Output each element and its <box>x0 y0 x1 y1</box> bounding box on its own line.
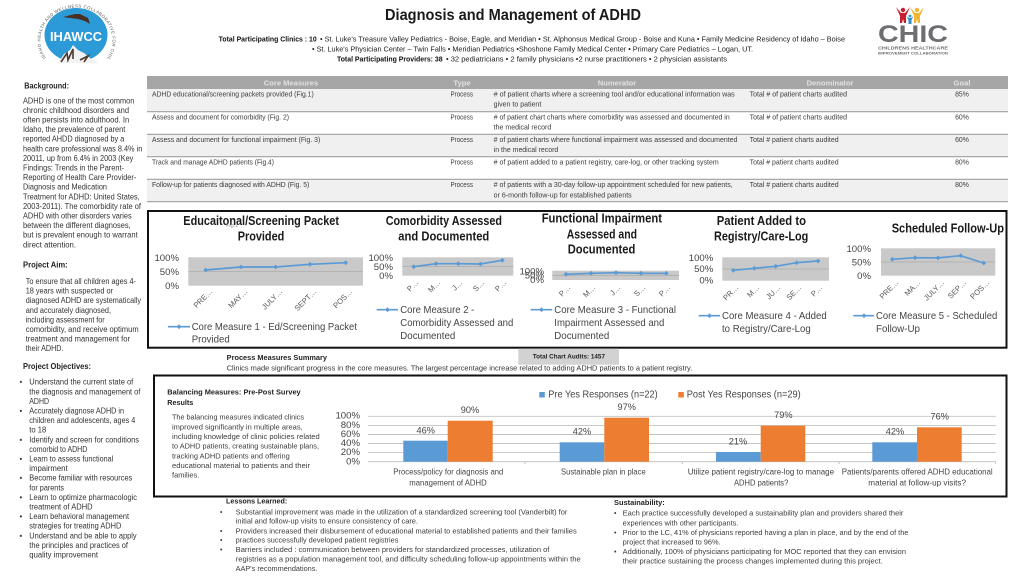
row 3 <box>152 137 969 154</box>
panel: project objectives: • <box>20 406 22 416</box>
panel: project objectives: Understand and be able to apply <box>29 531 137 540</box>
table header <box>264 78 970 88</box>
participating clinics and providers: • 32 pediatricians • 2 family physicians •2 nurse practitioners • 2 physician assistants <box>446 56 728 63</box>
row 3: Total # patient charts audited <box>750 137 839 144</box>
callout: total chart audits <box>518 349 619 365</box>
balancing measures text: families. <box>172 473 199 480</box>
panel: project objectives: Become familiar with resources <box>29 474 132 483</box>
panel: background: chronic childhood disorders and <box>23 106 129 115</box>
bar chart: pre/post survey: 0% <box>346 456 360 468</box>
participating clinics and providers <box>219 36 845 63</box>
chart 3: functional impairment: Core Measure 3 - Functional <box>554 305 676 316</box>
row 1: Process <box>450 92 473 98</box>
bar chart: pre/post survey: 60% <box>341 429 360 440</box>
panel: sustainability: Each practice successfully developed a sustainability plan and providers shared their <box>623 511 904 518</box>
panel: background: direct attention. <box>23 240 76 249</box>
balancing measures text: The balancing measures indicated clinics <box>172 415 305 422</box>
chart legend <box>539 390 801 401</box>
panel: sustainability: Additionally, 100% of physicians participating for MOC reported that they can envision <box>623 549 906 556</box>
row 4: Total # patient charts audited <box>750 160 839 166</box>
row 1: 85% <box>955 92 969 98</box>
panel: lessons learned: AAP's recommendations. <box>236 566 317 573</box>
panel: lessons learned: registries as a population management tool, and difficulty scheduling follow-up appointments within the <box>236 557 581 564</box>
panel: background: Treatment for ADHD: United States, <box>23 192 140 201</box>
row 3: # of patient charts where functional impairment was assessed and documented <box>494 137 738 144</box>
bar chart: pre/post survey: 79% <box>774 410 792 420</box>
panel: project objectives: • <box>20 435 22 444</box>
panel: project objectives: ADHD <box>29 397 49 406</box>
panel: background: Diagnosis and Medication <box>23 183 107 192</box>
panel: project aim: 18 years with suspected or <box>26 287 113 296</box>
chart 5: scheduled follow-up: JULY… <box>922 278 946 303</box>
process measures summary: Clinics made significant progress in the core measures. The largest percentage increase related to adding ADHD patients to a patient registry. <box>227 365 692 372</box>
panel: project objectives: Learn to assess functional <box>29 454 114 464</box>
row 3: in the medical record <box>494 147 558 154</box>
chart 1: educational/screening packet: 0% <box>165 281 179 292</box>
panel: project objectives: for parents <box>29 483 64 492</box>
row 5: Follow-up for patients diagnosed with ADHD (Fig. 5) <box>152 182 309 189</box>
chart legend: Post Yes Responses (n=29) <box>687 390 801 401</box>
row 4: Track and manage ADHD patients (Fig.4) <box>152 160 274 166</box>
participating clinics and providers: Total Participating Providers: 38 <box>337 56 443 63</box>
chart 2: comorbidity: M… <box>426 278 442 294</box>
panel: sustainability: • <box>614 530 617 537</box>
panel: project objectives: comorbid to ADHD <box>29 445 88 454</box>
bar chart: pre/post survey: ADHD patients? <box>734 478 789 487</box>
chart 1: educational/screening packet <box>154 214 363 346</box>
chart 5: scheduled follow-up: MA… <box>903 278 922 298</box>
panel: project objectives: • <box>20 474 22 483</box>
chart 2: comorbidity: Comorbidity Assessed and <box>400 318 513 329</box>
panel: project aim: their ADHD. <box>26 344 63 353</box>
row 3: Assess and document for functional impairment (Fig. 3) <box>152 137 320 144</box>
balancing measures text <box>167 389 320 480</box>
table header: Type <box>453 78 471 88</box>
balancing measures text: to ADHD patients, creating sustainable plans, <box>172 444 319 451</box>
balancing measures text: educational material to patients and their <box>172 463 311 470</box>
chart 4: patient added to registry: 50% <box>694 264 714 275</box>
chart 5: scheduled follow-up: SEP… <box>946 278 968 301</box>
row 2: Total # of patient charts audited <box>750 114 847 122</box>
chart 4: patient added to registry: 100% <box>689 253 714 264</box>
bar chart: pre/post survey <box>335 390 996 487</box>
chart 5: scheduled follow-up: 50% <box>852 258 871 268</box>
panel: project objectives: • <box>20 493 22 502</box>
panel: project objectives: Learn behavioral management <box>29 512 130 521</box>
chart 3: functional impairment <box>519 211 679 342</box>
panel: project objectives: quality improvement <box>29 550 99 560</box>
chart 1: educational/screening packet: 50% <box>160 267 179 278</box>
chart legend: Pre Yes Responses (n=22) <box>548 390 658 401</box>
panel: sustainability: project that increased to 96%. <box>623 540 721 546</box>
chart 5: scheduled follow-up <box>846 221 1004 335</box>
panel: project objectives: strategies for treating ADHD <box>29 522 122 531</box>
chart 3: functional impairment: Impairment Assessed and <box>554 318 664 329</box>
participating clinics and providers: • St. Luke's Treasure Valley Pediatrics - Boise, Eagle, and Meridian • St. Alphonsus Medical Group - Boise and Kuna • Family Medicine Residency of Idaho – Boise <box>320 36 845 44</box>
panel: sustainability: Prior to the LC, 41% of physicians reported having a plan in place, and by the end of the <box>623 530 909 537</box>
chart 2: comorbidity: S… <box>471 278 486 293</box>
chart 3: functional impairment: Functional Impairment <box>542 211 663 225</box>
chart 4: patient added to registry: M… <box>745 283 761 299</box>
table header: Numerator <box>598 78 636 88</box>
bar chart: pre/post survey: 42% <box>886 426 904 436</box>
panel: project aim: treatment and management for <box>26 335 130 344</box>
row 4: 80% <box>955 160 969 166</box>
chart 5: scheduled follow-up: POS… <box>968 278 991 301</box>
participating clinics and providers: Total Participating Clinics : 10 <box>219 36 317 44</box>
panel: lessons learned: • <box>220 509 223 516</box>
panel: lessons learned: • <box>220 547 223 554</box>
panel: lessons learned: practices successfully developed patient registries <box>236 538 399 545</box>
panel: background: ADHD with other disorders varies <box>23 212 132 220</box>
panel: project objectives: • <box>20 512 22 521</box>
panel: sustainability <box>614 500 909 566</box>
row 5: # of patients with a 30-day follow-up appointment scheduled for new patients, <box>494 182 733 189</box>
row 1: Total # of patient charts audited <box>750 92 847 98</box>
chart 1: educational/screening packet: PRE… <box>192 287 214 310</box>
row 1: # of patient charts where a screening tool and/or educational information was <box>494 92 735 98</box>
process measures summary: Process Measures Summary <box>227 355 327 362</box>
bar chart: pre/post survey: management of ADHD <box>409 478 487 487</box>
bar chart: pre/post survey: 42% <box>573 426 591 436</box>
row 2: 60% <box>955 114 969 122</box>
chart 3: functional impairment: J… <box>608 283 622 297</box>
chart 4: patient added to registry: P… <box>809 283 824 298</box>
chart 2: comorbidity: and Documented <box>398 230 489 244</box>
bar chart: pre/post survey: 97% <box>618 402 636 412</box>
bar chart: pre/post survey: 90% <box>461 405 479 415</box>
logo: IHAWCC: IHAWCC <box>50 30 102 44</box>
bar chart: pre/post survey: Sustainable plan in place <box>561 467 646 476</box>
panel: project aim: including assessment for <box>26 315 105 324</box>
panel: project aim <box>23 261 141 353</box>
row 3: 60% <box>955 137 969 144</box>
chart 3: functional impairment: P… <box>557 283 572 298</box>
row 1: ADHD educational/screening packets provided (Fig.1) <box>152 92 314 98</box>
participating clinics and providers: • St. Luke's Physician Center – Twin Falls • Meridian Pediatrics •Shoshone Family Medical Center • Primary Care Pediatrics – Logan, UT. <box>312 47 753 54</box>
chart 4: patient added to registry: to Registry/Care-Log <box>722 324 811 335</box>
chart 1: educational/screening packet: Provided <box>192 335 230 346</box>
panel: background: often persists into adulthood. In <box>23 116 129 124</box>
chart 5: scheduled follow-up: PRE… <box>878 278 900 301</box>
chart 4: patient added to registry: PR… <box>721 283 740 302</box>
chart 3: functional impairment: 50% <box>525 270 544 282</box>
chart 2: comorbidity: Core Measure 2 - <box>400 305 474 316</box>
panel: project aim: To ensure that all children ages 4- <box>26 277 136 286</box>
bar chart: pre/post survey: material at follow-up visits? <box>868 478 967 487</box>
row 5: or 6-month follow-up for established patients <box>494 192 632 200</box>
row 1: given to patient <box>494 102 541 108</box>
panel: lessons learned: • <box>220 538 223 545</box>
panel: sustainability: Sustainability: <box>614 500 665 507</box>
logo: IHAWCC <box>38 4 116 63</box>
chart 4: patient added to registry <box>689 214 829 335</box>
chart 3: functional impairment: P… <box>657 283 672 298</box>
chart 5: scheduled follow-up: Follow-Up <box>876 324 920 335</box>
logo: CHIC: IMPROVEMENT COLLABORATION <box>878 52 948 56</box>
panel: background: reported AHDD diagnosed by a <box>23 135 125 144</box>
panel: lessons learned: initial and follow-up visits to ensure consistency of care. <box>236 519 418 526</box>
row 5 <box>152 182 969 200</box>
bar chart: pre/post survey: Process/policy for diagnosis and <box>393 467 503 476</box>
row 2: Process <box>450 114 473 122</box>
panel: background: ADHD is one of the most common <box>23 96 134 105</box>
row 2: Assess and document for comorbidity (Fig. 2) <box>152 114 289 122</box>
row 3: Process <box>450 137 473 144</box>
panel: lessons learned: • <box>220 528 223 535</box>
chart 3: functional impairment: Documented <box>568 243 635 257</box>
panel: background <box>23 81 142 249</box>
chart 4: patient added to registry: 0% <box>699 276 714 286</box>
row 1 <box>152 92 969 108</box>
bar chart: pre/post survey: 76% <box>931 411 949 421</box>
chart 1: educational/screening packet: Educaitonal/Screening Packet <box>183 214 340 228</box>
chart 3: functional impairment: Documented <box>554 331 609 342</box>
table header: Goal <box>954 78 970 88</box>
bar chart: pre/post survey: 40% <box>341 438 360 449</box>
chart 2: comorbidity: P… <box>493 278 508 293</box>
chart 5: scheduled follow-up: Core Measure 5 - Scheduled <box>876 311 997 322</box>
balancing measures text: Balancing Measures: Pre-Post Survey <box>167 389 301 396</box>
logo: CHIC: CHIC <box>878 21 948 48</box>
panel: project objectives: to 18 <box>29 426 46 435</box>
chart 3: functional impairment: 100% <box>519 266 544 278</box>
chart 4: patient added to registry: SE… <box>785 283 803 302</box>
chart 2: comorbidity: 0% <box>379 271 393 282</box>
bar chart: pre/post survey: Utilize patient registry/care-log to manage <box>688 467 835 476</box>
panel: sustainability: • <box>614 549 617 556</box>
table header: Denominator <box>807 78 853 88</box>
chart 1: educational/screening packet: Fig.1 <box>226 223 238 229</box>
chart 3: functional impairment: S… <box>632 283 647 298</box>
bar chart: pre/post survey: 21% <box>729 436 747 446</box>
chart 1: educational/screening packet: SEPT… <box>293 287 318 313</box>
panel: project objectives: Understand the current state of <box>29 378 134 387</box>
panel: project objectives: treatment of ADHD <box>29 502 93 512</box>
panel: lessons learned: Providers increased their disbursement of educational material to established patients and their families <box>236 528 577 535</box>
chart 2: comorbidity: Documented <box>400 331 455 342</box>
panel: project objectives: • <box>20 378 22 387</box>
panel: background: 2003-2011). The comorbidity rate of <box>23 202 142 211</box>
row 4: Process <box>450 160 473 166</box>
panel: project aim: Project Aim: <box>23 261 68 270</box>
panel: sustainability: • <box>614 511 617 518</box>
title: Diagnosis and Management of ADHD <box>385 7 641 24</box>
panel: sustainability: their practice sustaining the process changes implemented during this project. <box>623 559 883 566</box>
panel: project objectives: children and adolescents, ages 4 <box>29 416 136 425</box>
panel: run charts frame <box>148 211 1006 348</box>
balancing measures text: tracking ADHD patients and offering <box>172 453 290 460</box>
panel: project aim: comorbidity, and receive optimum <box>26 325 139 334</box>
chart 2: comorbidity: 100% <box>368 253 393 264</box>
panel: project objectives: • <box>20 531 22 540</box>
panel: project objectives: the principles and practices of <box>29 541 129 550</box>
panel: project objectives: Identify and screen for conditions <box>29 435 139 444</box>
panel: background: between the different diagnoses, <box>23 221 131 230</box>
chart 1: educational/screening packet: 100% <box>154 253 179 264</box>
logo: CHIC: CHILDRENS HEALTHCARE <box>878 46 948 50</box>
balancing measures text: Results <box>167 400 193 407</box>
row 2: the medical record <box>494 124 551 132</box>
process measures summary <box>227 355 692 372</box>
chart 3: functional impairment: 0% <box>530 275 544 286</box>
row 5: 80% <box>955 182 969 189</box>
chart 2: comorbidity: P… <box>405 278 420 293</box>
panel: lessons learned: Substantial improvement was made in the utilization of a standardized screening tool (Vanderbilt) for <box>236 509 568 516</box>
panel: background: Findings: Trends in the Parent- <box>23 164 124 172</box>
chart 5: scheduled follow-up: 0% <box>857 271 871 282</box>
chart 1: educational/screening packet: MAY… <box>226 287 249 310</box>
panel: core measures table <box>147 76 1008 202</box>
bar chart: pre/post survey: 46% <box>417 425 435 435</box>
panel: project aim: and accurately diagnosed, <box>26 306 111 315</box>
panel: lessons learned: Lessons Learned: <box>226 498 287 505</box>
chart 2: comorbidity: Comorbidity Assessed <box>386 214 502 228</box>
panel: background: but is prevalent enough to warrant <box>23 231 138 240</box>
balancing measures text: improved significantly in multiple areas, <box>172 424 303 431</box>
row 5: Process <box>450 182 473 189</box>
chart 4: patient added to registry: Registry/Care-Log <box>714 230 808 244</box>
panel: background: 20011, up from 6.4% in 2003 (Key <box>23 154 133 163</box>
chart 4: patient added to registry: Core Measure 4 - Added <box>722 311 827 322</box>
chart 4: patient added to registry: JU… <box>764 283 782 301</box>
chart 1: educational/screening packet: JULY… <box>260 287 284 312</box>
chart 3: functional impairment: Assessed and <box>567 227 637 241</box>
panel: background: health care professional was 8.4% in <box>23 144 142 153</box>
chart 5: scheduled follow-up: Scheduled Follow-Up <box>892 221 1004 235</box>
chart 4: patient added to registry: Patient Added to <box>717 214 806 228</box>
chart 5: scheduled follow-up: 100% <box>846 244 871 255</box>
callout: total chart audits: Total Chart Audits: 1457 <box>533 353 605 360</box>
chart 2: comorbidity: 50% <box>374 262 393 273</box>
panel: project objectives: Learn to optimize pharmacologic <box>29 493 137 502</box>
panel: project objectives: • <box>20 454 22 464</box>
bar chart: pre/post survey: Patients/parents offered ADHD educational <box>842 467 993 476</box>
panel: lessons learned <box>220 498 581 573</box>
chart 1: educational/screening packet: POS… <box>331 287 354 310</box>
panel: project objectives: Project Objectives: <box>23 362 91 371</box>
panel: background: Reporting of Health Care Provider- <box>23 173 137 182</box>
panel: project aim: diagnosed ADHD are systematically <box>26 296 141 305</box>
panel: balancing measures frame <box>154 376 1006 496</box>
balancing measures text: including knowledge of clinic policies related <box>172 434 320 441</box>
bar chart: pre/post survey: 20% <box>341 447 360 458</box>
row 2 <box>152 114 969 132</box>
panel: background: Idaho, the prevalence of parent <box>23 125 126 134</box>
row 4: # of patient added to a patient registry, care-log, or other tracking system <box>494 160 719 166</box>
table header: Core Measures <box>264 78 318 88</box>
row 4 <box>152 160 969 166</box>
logo: CHIC <box>878 7 948 56</box>
row 5: Total # patient charts audited <box>750 182 839 189</box>
chart 3: functional impairment: M… <box>581 283 597 299</box>
panel: project objectives <box>20 362 141 560</box>
bar chart: pre/post survey: 80% <box>341 420 360 431</box>
panel: project objectives: Accurately diagnose ADHD in <box>29 406 124 416</box>
panel: sustainability: experiences with other participants. <box>623 520 738 527</box>
chart 1: educational/screening packet: Provided <box>238 230 284 244</box>
panel: lessons learned: Barriers included : communication between providers for standardized processes, utilization of <box>236 547 549 554</box>
panel: background: Background: <box>24 81 69 90</box>
panel: project objectives: the diagnosis and management of <box>29 387 141 396</box>
chart 2: comorbidity: J… <box>450 278 464 292</box>
chart 2: comorbidity <box>368 214 513 342</box>
panel: project objectives: impairment <box>29 464 68 473</box>
bar chart: pre/post survey: 100% <box>335 411 360 422</box>
row 2: # of patient chart charts where comorbidity was assessed and documented in <box>494 114 730 122</box>
chart 1: educational/screening packet: Core Measure 1 - Ed/Screening Packet <box>192 322 357 333</box>
